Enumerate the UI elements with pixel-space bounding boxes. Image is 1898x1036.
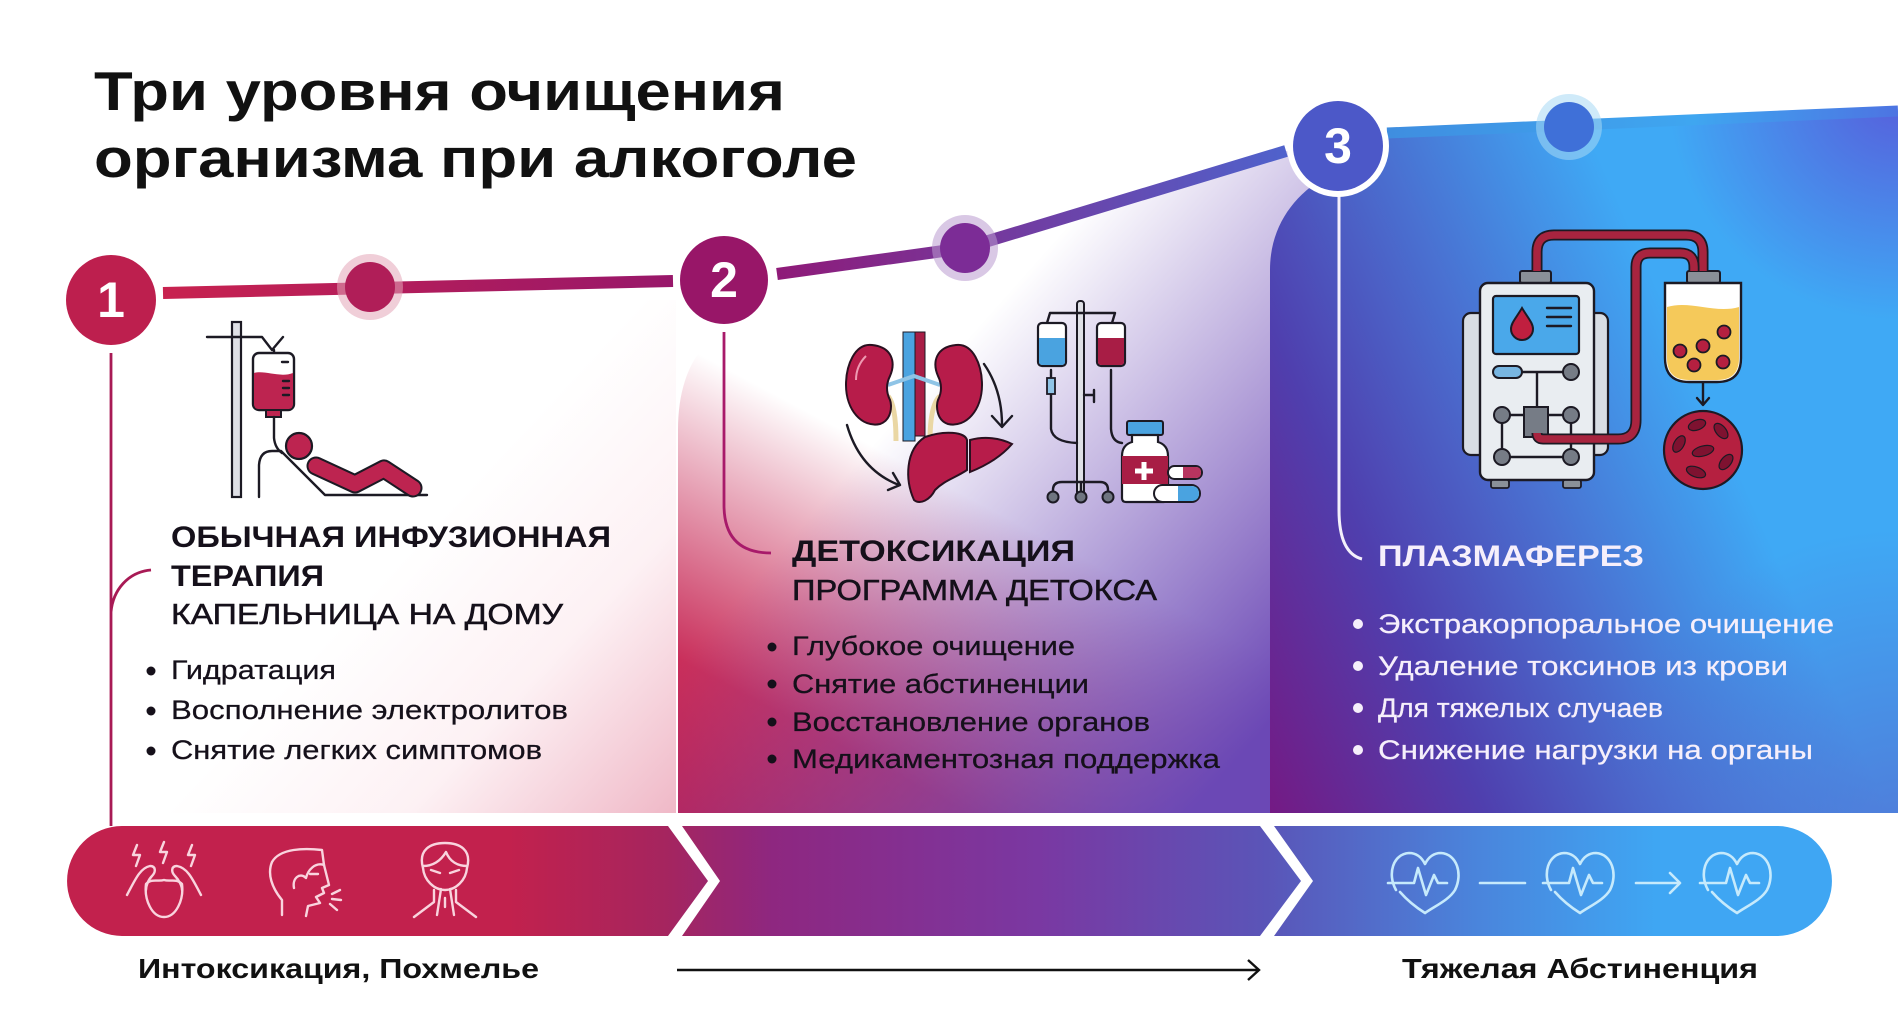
connector: level 1 stem bbox=[111, 353, 151, 826]
progress line: segment 1 bbox=[163, 281, 673, 293]
icon: heart rate 1 bbox=[1388, 853, 1459, 913]
step number 3 bbox=[1287, 95, 1389, 197]
icon: IV stand and medication bbox=[1038, 301, 1202, 502]
bullet list: level 1: Гидратация bbox=[171, 655, 336, 685]
bullet list: level 2: Восстановление органов bbox=[792, 707, 1150, 737]
progress line: segment 3 bbox=[1387, 111, 1898, 133]
title: Три уровня очищения bbox=[94, 60, 785, 122]
icon: coughing profile bbox=[270, 849, 341, 916]
icon: dash between hearts bbox=[1480, 882, 1525, 884]
node on segment 1 bbox=[337, 254, 403, 320]
bullet list: level 2: Глубокое очищение bbox=[792, 631, 1075, 661]
label: intoxication: Интоксикация, Похмелье bbox=[138, 953, 539, 984]
bullet list: level 2 bbox=[768, 631, 1221, 774]
heading: level 3: ПЛАЗМАФЕРЕЗ bbox=[1378, 540, 1644, 573]
step number 3: 3 bbox=[1324, 118, 1352, 174]
band segment 2 bbox=[682, 826, 1301, 936]
bullet list: level 1: Восполнение электролитов bbox=[171, 695, 568, 725]
heading: level 1: КАПЕЛЬНИЦА НА ДОМУ bbox=[171, 599, 564, 631]
panel: level 1 background bbox=[0, 300, 676, 813]
panel: level 2 background bbox=[678, 151, 1340, 813]
severity band bbox=[67, 826, 1832, 936]
icon: headache bbox=[127, 842, 201, 917]
node on segment 2 bbox=[932, 215, 998, 281]
panel: level 3 background bbox=[1270, 111, 1898, 813]
title: организма при алкоголе bbox=[94, 127, 857, 189]
heading: level 2 bbox=[792, 535, 1158, 607]
label: severe withdrawal: Тяжелая Абстиненция bbox=[1402, 953, 1758, 984]
bullet list: level 3: Для тяжелых случаев bbox=[1378, 693, 1663, 723]
step number 1: 1 bbox=[97, 272, 125, 328]
heading: level 1 bbox=[171, 521, 611, 631]
step number 1 bbox=[66, 255, 156, 345]
band segment 1 bbox=[67, 826, 708, 936]
icon: kidneys and liver bbox=[846, 332, 1012, 502]
connector: level 3 stem bbox=[1339, 190, 1362, 559]
title bbox=[94, 60, 857, 189]
heading: level 2: ПРОГРАММА ДЕТОКСА bbox=[792, 575, 1158, 607]
bullet list: level 1 bbox=[146, 655, 568, 765]
band segment 3 bbox=[1274, 826, 1832, 936]
connector: level 2 stem bbox=[724, 332, 771, 553]
bullet list: level 1: Снятие легких симптомов bbox=[171, 735, 542, 765]
progress line: segment 2 bbox=[777, 151, 1286, 274]
heading: level 1: ТЕРАПИЯ bbox=[171, 560, 324, 593]
node on segment 3 bbox=[1536, 94, 1602, 160]
bullet list: level 3 bbox=[1353, 609, 1834, 765]
icon: nausea front view bbox=[414, 843, 476, 917]
heading: level 2: ДЕТОКСИКАЦИЯ bbox=[792, 535, 1075, 568]
bullet list: level 2: Снятие абстиненции bbox=[792, 669, 1089, 699]
icon: patient on IV drip bbox=[207, 322, 427, 497]
bullet list: level 3: Удаление токсинов из крови bbox=[1378, 651, 1788, 681]
bullet list: level 3: Экстракорпоральное очищение bbox=[1378, 609, 1834, 639]
icon: heart rate 2 bbox=[1543, 853, 1614, 913]
step number 2 bbox=[675, 231, 773, 329]
icon: heart rate 3 bbox=[1700, 853, 1771, 913]
step number 2: 2 bbox=[710, 252, 738, 308]
arrow: severity direction bbox=[677, 960, 1259, 980]
bullet list: level 3: Снижение нагрузки на органы bbox=[1378, 735, 1813, 765]
icon: plasmapheresis machine bbox=[1463, 235, 1742, 489]
icon: arrow between hearts bbox=[1636, 873, 1680, 893]
bullet list: level 2: Медикаментозная поддержка bbox=[792, 744, 1221, 774]
heading: level 1: ОБЫЧНАЯ ИНФУЗИОННАЯ bbox=[171, 521, 611, 554]
